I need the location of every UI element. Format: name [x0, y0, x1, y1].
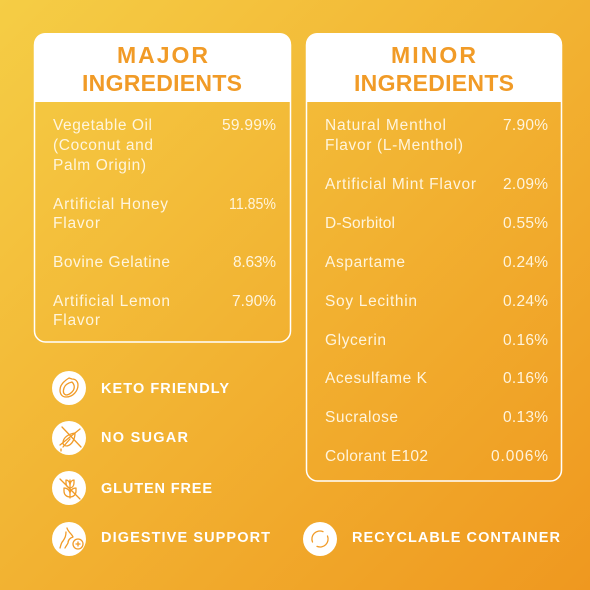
- badge: no sugar: [52, 421, 189, 455]
- ingredient names: Natural Menthol: [325, 117, 446, 134]
- ingredient percentages: 0.24%: [503, 293, 548, 310]
- label: KETO FRIENDLY: [101, 381, 229, 397]
- heading: minor ingredients: MINOR: [391, 42, 476, 68]
- heading: major ingredients: [82, 42, 242, 96]
- ingredient percentages: 0.13%: [503, 409, 548, 426]
- ingredient names: [53, 117, 170, 329]
- ingredient percentages: [222, 117, 276, 310]
- ingredient percentages: 7.90%: [232, 293, 276, 310]
- badge: gluten free: [52, 471, 212, 505]
- ingredient percentages: [491, 117, 548, 465]
- ingredient names: Flavor (L-Menthol): [325, 137, 463, 154]
- panel: minor ingredients: [306, 33, 562, 481]
- heading: minor ingredients: [354, 42, 514, 96]
- ingredient percentages: 0.16%: [503, 370, 548, 387]
- label: DIGESTIVE SUPPORT: [101, 530, 270, 546]
- icon: seed: [52, 371, 86, 405]
- ingredient names: (Coconut and: [53, 137, 153, 154]
- ingredient names: Aspartame: [325, 254, 405, 271]
- ingredient names: Palm Origin): [53, 157, 146, 174]
- ingredient names: Colorant E102: [325, 448, 428, 465]
- heading: major ingredients: MAJOR: [117, 42, 208, 68]
- label: RECYCLABLE CONTAINER: [352, 530, 561, 546]
- heading: minor ingredients: INGREDIENTS: [354, 70, 514, 96]
- ingredient names: Artificial Mint Flavor: [325, 176, 476, 193]
- ingredient percentages: 2.09%: [503, 176, 548, 193]
- ingredient percentages: 0.24%: [503, 254, 548, 271]
- ingredient names: Flavor: [53, 215, 100, 232]
- ingredient percentages: 0.16%: [503, 332, 548, 349]
- heading: major ingredients: INGREDIENTS: [82, 70, 242, 96]
- ingredient percentages: 0.006%: [491, 448, 548, 465]
- label: GLUTEN FREE: [101, 481, 212, 497]
- ingredient percentages: 59.99%: [222, 117, 276, 134]
- ingredient names: Sucralose: [325, 409, 398, 426]
- ingredient names: D-Sorbitol: [325, 215, 395, 232]
- icon: digestive: [52, 522, 86, 556]
- ingredient names: Artificial Honey: [53, 196, 168, 213]
- icon: crossed wheat: [52, 471, 86, 505]
- ingredient names: [325, 117, 476, 465]
- ingredient names: Vegetable Oil: [53, 117, 152, 134]
- ingredient percentages: 7.90%: [503, 117, 548, 134]
- ingredient names: Acesulfame K: [325, 370, 428, 387]
- icon: crossed leaf: [52, 421, 86, 455]
- ingredient names: Artificial Lemon: [53, 293, 170, 310]
- ingredient percentages: 0.55%: [503, 215, 548, 232]
- label: NO SUGAR: [101, 430, 189, 446]
- panel header: [34, 33, 291, 102]
- ingredient names: Soy Lecithin: [325, 293, 417, 310]
- panel outline: [306, 34, 562, 481]
- panel: major ingredients: [34, 33, 291, 342]
- ingredient percentages: 8.63%: [233, 254, 276, 271]
- badge: keto friendly: [52, 371, 229, 405]
- panel header: [306, 33, 562, 102]
- ingredient names: Flavor: [53, 312, 100, 329]
- ingredient names: Bovine Gelatine: [53, 254, 170, 271]
- ingredient percentages: 11.85%: [229, 196, 276, 213]
- ingredient names: Glycerin: [325, 332, 386, 349]
- panel outline: [34, 34, 290, 342]
- icon: recycle arrows: [303, 522, 337, 556]
- badge: digestive support: [52, 522, 270, 556]
- badge: recyclable container: [303, 522, 561, 556]
